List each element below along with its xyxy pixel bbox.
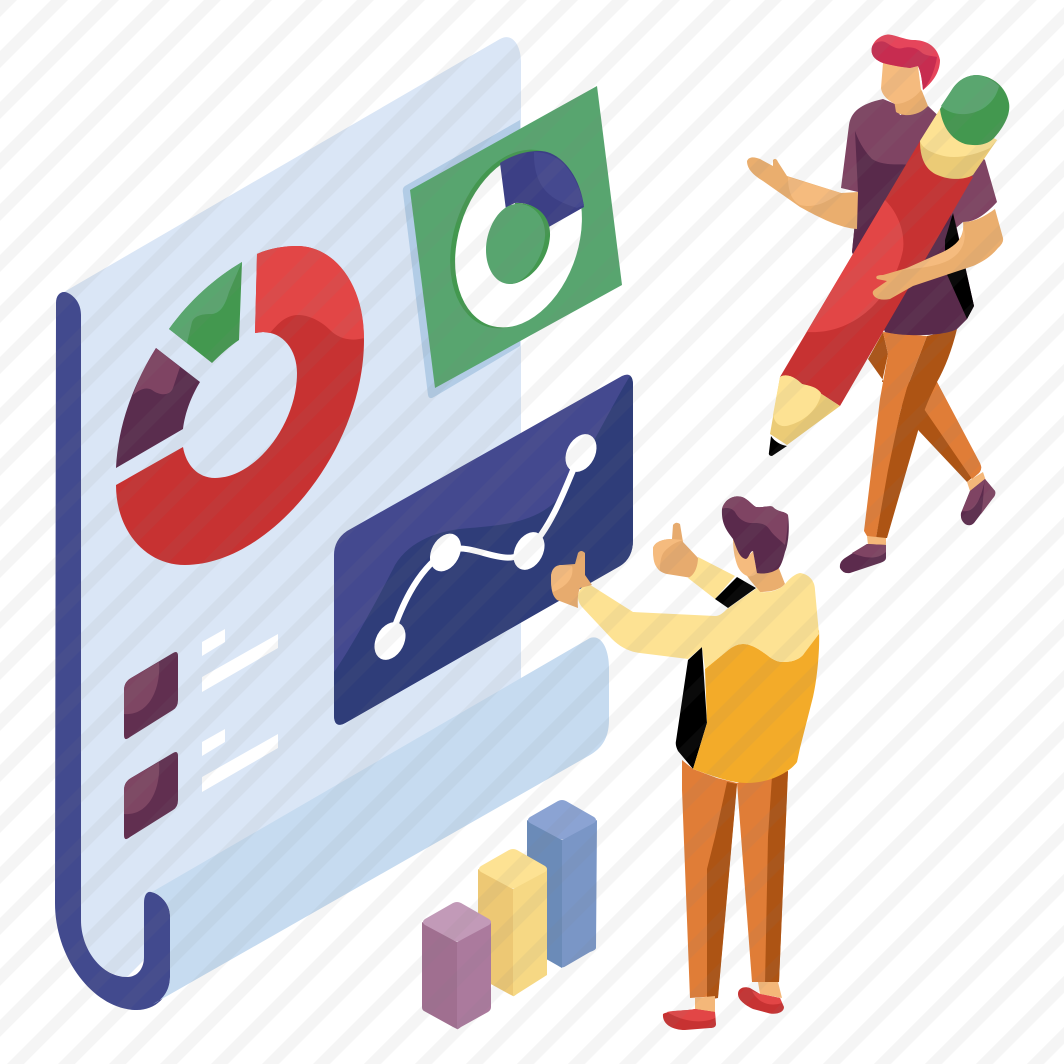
legend item 1 bbox=[124, 629, 278, 739]
chart points bbox=[368, 429, 603, 665]
yellow bar bbox=[478, 849, 547, 996]
hair bbox=[722, 496, 789, 574]
green segment bbox=[169, 262, 242, 363]
right arm bbox=[873, 209, 1003, 300]
far hand bbox=[653, 523, 702, 578]
paper sheet bbox=[60, 37, 521, 977]
neck bbox=[740, 566, 785, 592]
face bbox=[881, 63, 921, 104]
legs bbox=[682, 760, 788, 1012]
neck bbox=[894, 85, 928, 115]
far sleeve bbox=[688, 557, 735, 599]
3D bar chart bbox=[422, 800, 597, 1029]
back leg bbox=[868, 332, 986, 491]
person with pencil bbox=[747, 35, 1009, 573]
torso bbox=[578, 573, 819, 783]
pencil lead bbox=[769, 436, 787, 456]
yoke and near sleeve bbox=[578, 573, 819, 669]
card base bbox=[334, 375, 633, 725]
inner disc edge bbox=[510, 203, 550, 284]
vest bbox=[693, 630, 819, 783]
ring hole edge bbox=[441, 121, 589, 357]
pencil bbox=[769, 75, 1009, 456]
right shoe bbox=[738, 987, 784, 1014]
card shaded area bbox=[334, 376, 633, 725]
face bbox=[733, 539, 757, 576]
chart line bbox=[390, 453, 580, 640]
paper curl bbox=[152, 637, 609, 1004]
shoes bbox=[663, 987, 784, 1030]
near hand bbox=[551, 551, 592, 608]
left shoe bbox=[663, 1009, 716, 1030]
hair bbox=[872, 35, 940, 90]
right leg bbox=[737, 771, 788, 984]
purple bar bbox=[422, 902, 491, 1029]
pencil wood tip bbox=[770, 375, 840, 445]
donut chart bbox=[116, 246, 364, 565]
front leg bbox=[864, 329, 957, 546]
card background bbox=[410, 86, 622, 388]
legend item 2 bbox=[124, 729, 278, 839]
blue bar bbox=[527, 800, 597, 968]
line chart card bbox=[334, 375, 633, 725]
green chart card bbox=[403, 86, 622, 398]
navy ring segment bbox=[500, 151, 584, 228]
head bbox=[872, 35, 940, 115]
ankles bbox=[695, 982, 782, 1012]
person giving thumbs up bbox=[551, 496, 819, 1030]
legend list bbox=[124, 629, 278, 839]
panel: paper document bbox=[55, 37, 609, 1010]
pencil body bbox=[780, 141, 973, 406]
inner disc bbox=[486, 204, 545, 284]
pencil eraser bbox=[940, 75, 1009, 145]
black undershirt bbox=[676, 577, 756, 769]
back shoe bbox=[961, 479, 995, 525]
card shadow bbox=[403, 120, 520, 398]
left leg bbox=[682, 760, 737, 1000]
red segment bbox=[116, 246, 364, 565]
pencil highlight bbox=[780, 200, 903, 377]
front shoe bbox=[840, 544, 886, 573]
shirt bbox=[841, 99, 997, 335]
pencil ferrule bbox=[920, 109, 997, 179]
paper left edge and hook bbox=[55, 292, 170, 1010]
purple segment bbox=[116, 348, 200, 468]
left arm bbox=[747, 157, 858, 229]
ring hole bbox=[446, 125, 591, 355]
